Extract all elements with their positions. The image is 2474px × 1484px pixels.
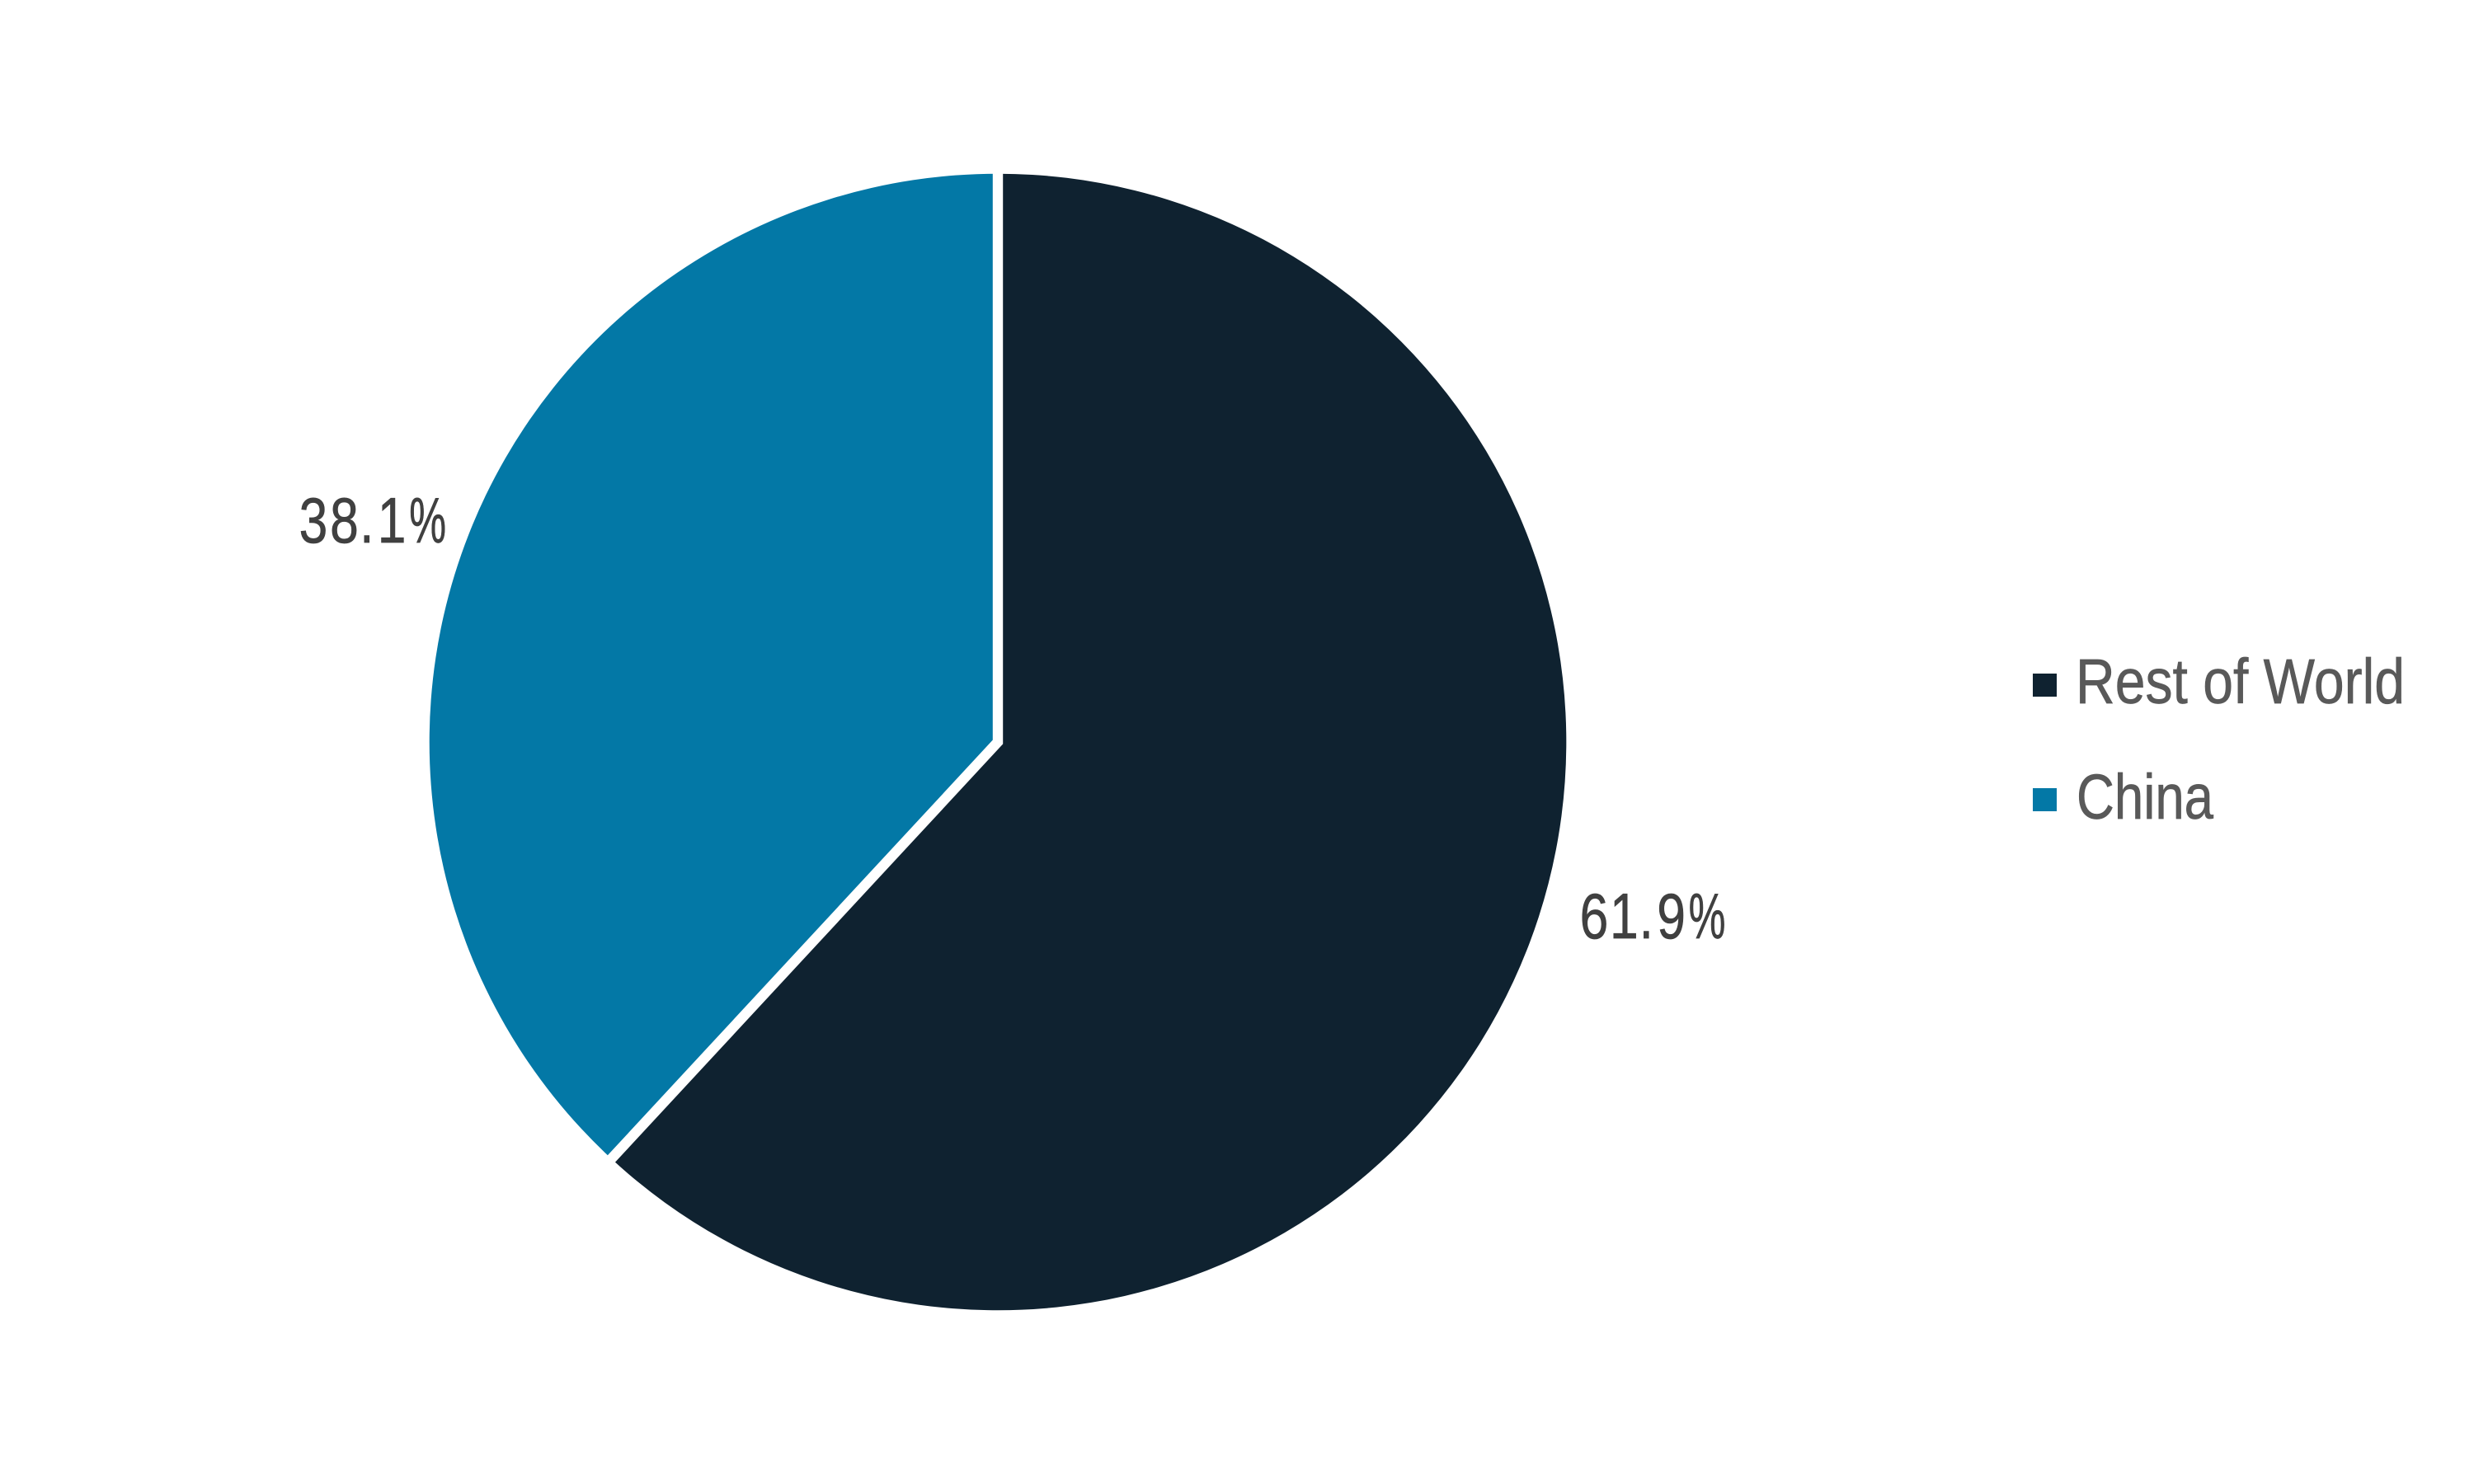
data label: Rest of World 61.9%: % <box>1689 880 1725 952</box>
legend <box>2033 646 2405 833</box>
slice: China 38.1% <box>430 174 998 1159</box>
legend label: China: China <box>2077 762 2213 833</box>
data label: Rest of World 61.9%: 61.9 <box>1580 880 1686 952</box>
data label: China 38.1%: % <box>409 484 446 556</box>
legend label: Rest of World: Rest of World <box>2076 646 2405 717</box>
slice: Rest of World 61.9% <box>611 174 1566 1310</box>
data label: China 38.1%: 38.1 <box>299 484 407 556</box>
legend swatch: China <box>2033 788 2057 811</box>
legend swatch: Rest of World <box>2033 674 2057 697</box>
pie chart <box>430 165 1566 1310</box>
